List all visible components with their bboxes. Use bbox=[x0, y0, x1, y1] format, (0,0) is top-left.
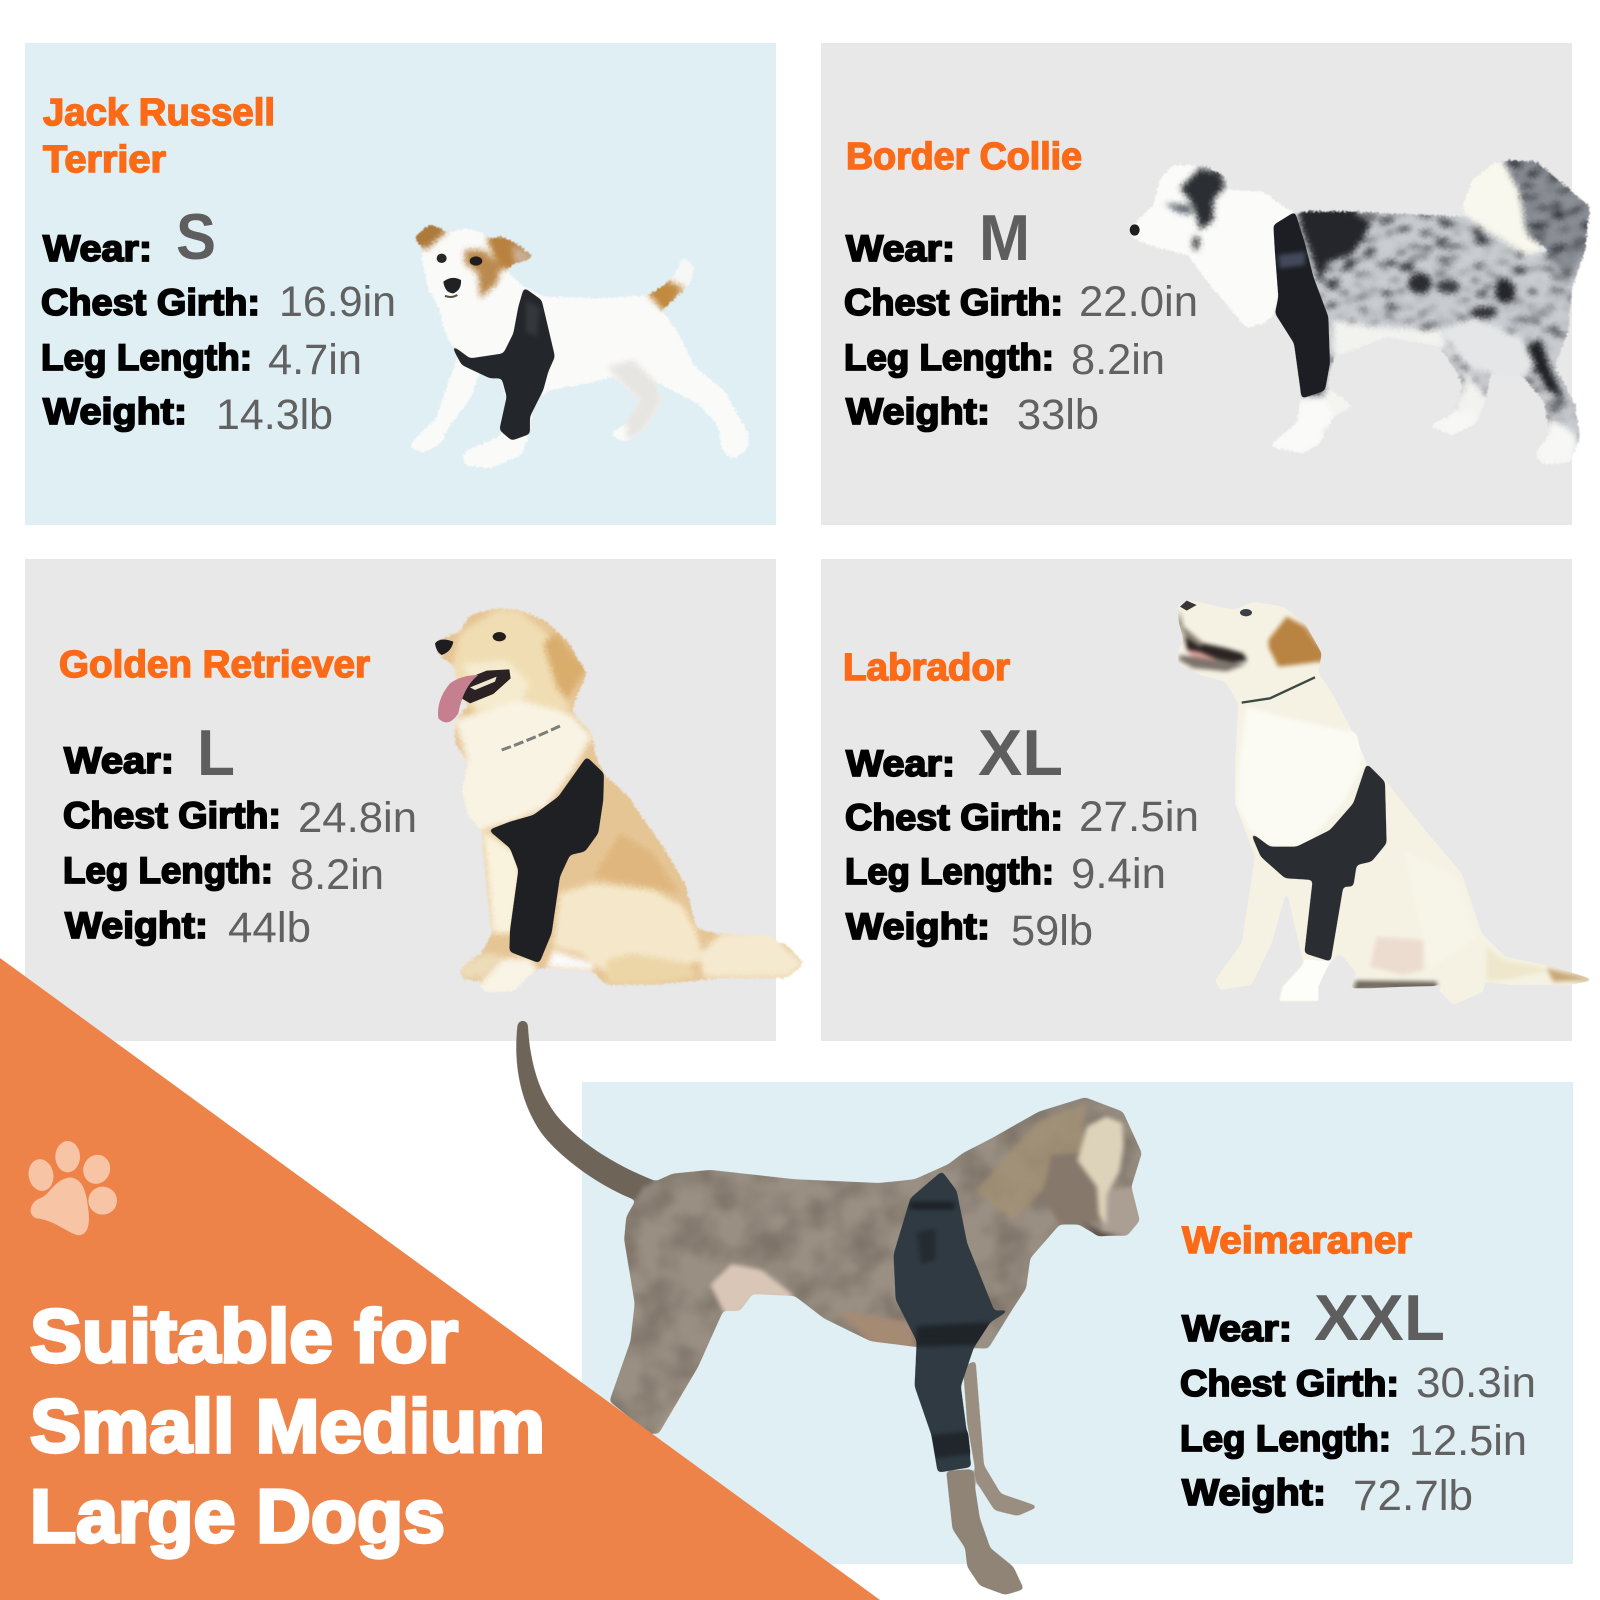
text: weight: 33lb bbox=[1017, 391, 1099, 439]
heading: breed: Golden Retriever bbox=[59, 644, 370, 686]
heading: breed: Weimaraner bbox=[1182, 1220, 1412, 1262]
text: weight bbox=[1182, 1472, 1473, 1520]
text: chest girth: 27.5in bbox=[1079, 793, 1199, 841]
text: chest girth: Chest Girth: bbox=[63, 795, 281, 836]
headline: Suitable for bbox=[30, 1294, 458, 1378]
text: weight: 14.3lb bbox=[216, 391, 333, 439]
heading: breed: Terrier bbox=[43, 139, 166, 181]
collar bbox=[1242, 677, 1315, 703]
text: weight bbox=[65, 904, 311, 952]
text: wear size bbox=[64, 716, 235, 789]
text: leg length bbox=[63, 850, 384, 899]
text: chest girth: Chest Girth: bbox=[41, 282, 260, 323]
text: chest girth bbox=[41, 278, 396, 326]
text: chest girth bbox=[1180, 1359, 1536, 1407]
sleeve bbox=[1250, 763, 1387, 962]
sleeve bbox=[894, 1171, 1011, 1473]
text: leg length bbox=[41, 336, 362, 384]
headline bbox=[30, 1294, 545, 1558]
text: weight: Weight: bbox=[43, 391, 187, 432]
text: leg length: 9.4in bbox=[1071, 850, 1166, 898]
text: chest girth: Chest Girth: bbox=[845, 797, 1063, 838]
dog photo: Weimaraner wearing sleeve bbox=[516, 1020, 1142, 1595]
text: leg length: Leg Length: bbox=[1180, 1418, 1391, 1459]
headline: Large Dogs bbox=[30, 1474, 445, 1558]
text: chest girth bbox=[845, 793, 1199, 841]
heading: breed bbox=[43, 92, 275, 181]
dog photo: Labrador wearing sleeve bbox=[1178, 600, 1595, 1005]
orange corner banner bbox=[0, 958, 880, 1600]
text: weight: 72.7lb bbox=[1353, 1472, 1473, 1520]
text: weight bbox=[846, 906, 1093, 955]
text: leg length: 8.2in bbox=[290, 851, 384, 899]
heading: breed: Jack Russell bbox=[43, 92, 275, 134]
text: leg length: Leg Length: bbox=[63, 850, 273, 891]
headline: Small Medium bbox=[30, 1384, 545, 1468]
dog photo: Golden Retriever wearing sleeve bbox=[435, 608, 805, 992]
text: chest girth: 16.9in bbox=[279, 278, 396, 326]
panel: Jack Russell Terrier bbox=[25, 43, 776, 525]
text: leg length: Leg Length: bbox=[844, 337, 1054, 378]
text: weight: 59lb bbox=[1011, 907, 1093, 955]
text: chest girth: 24.8in bbox=[298, 794, 417, 842]
text: leg length: 4.7in bbox=[268, 336, 362, 384]
text: wear size bbox=[846, 716, 1063, 789]
dog photo: Jack Russell Terrier wearing sleeve bbox=[408, 223, 748, 468]
panel: Border Collie bbox=[821, 43, 1590, 525]
text: leg length: Leg Length: bbox=[41, 337, 252, 378]
heading: breed: Labrador bbox=[843, 647, 1010, 689]
text: chest girth bbox=[844, 278, 1198, 326]
text: leg length: Leg Length: bbox=[845, 851, 1054, 892]
sleeve bbox=[1273, 212, 1330, 399]
mouth and tongue bbox=[438, 669, 511, 722]
text: wear size: XL bbox=[978, 716, 1063, 789]
text: leg length bbox=[844, 336, 1165, 384]
panel: Labrador bbox=[821, 559, 1595, 1041]
text: weight bbox=[846, 391, 1099, 439]
text: wear size: Wear: bbox=[64, 740, 174, 781]
text: chest girth: 30.3in bbox=[1416, 1359, 1536, 1407]
text: weight: 44lb bbox=[228, 904, 311, 952]
text: weight bbox=[43, 391, 333, 439]
text: leg length bbox=[845, 850, 1166, 898]
text: wear size: S bbox=[176, 200, 216, 273]
text: wear size: XXL bbox=[1314, 1281, 1445, 1354]
text: weight: Weight: bbox=[1182, 1472, 1326, 1513]
text: wear size: Wear: bbox=[846, 743, 955, 784]
sleeve bbox=[488, 757, 604, 963]
text: wear size bbox=[1182, 1281, 1445, 1354]
text: wear size: Wear: bbox=[43, 228, 152, 269]
panel: Weimaraner bbox=[516, 1020, 1573, 1595]
text: wear size bbox=[846, 201, 1030, 274]
heading: breed: Border Collie bbox=[846, 136, 1082, 178]
sleeve bbox=[450, 287, 555, 441]
text: chest girth: Chest Girth: bbox=[1180, 1363, 1399, 1404]
text: weight: Weight: bbox=[65, 905, 208, 946]
text: wear size: M bbox=[979, 201, 1030, 274]
text: leg length: 12.5in bbox=[1409, 1417, 1527, 1465]
text: leg length: 8.2in bbox=[1071, 336, 1165, 384]
icon: paw print bbox=[26, 1141, 117, 1235]
text: wear size: Wear: bbox=[846, 228, 955, 269]
text: wear size: L bbox=[197, 716, 235, 789]
text: weight: Weight: bbox=[846, 391, 990, 432]
dog photo: Border Collie wearing sleeve bbox=[1128, 160, 1590, 465]
text: wear size: Wear: bbox=[1182, 1308, 1292, 1349]
text: chest girth: Chest Girth: bbox=[844, 282, 1063, 323]
text: weight: Weight: bbox=[846, 906, 990, 947]
text: chest girth: 22.0in bbox=[1079, 278, 1198, 326]
text: wear size bbox=[43, 200, 216, 273]
panel: Golden Retriever bbox=[25, 559, 805, 1041]
text: chest girth bbox=[63, 794, 417, 842]
text: leg length bbox=[1180, 1417, 1527, 1465]
